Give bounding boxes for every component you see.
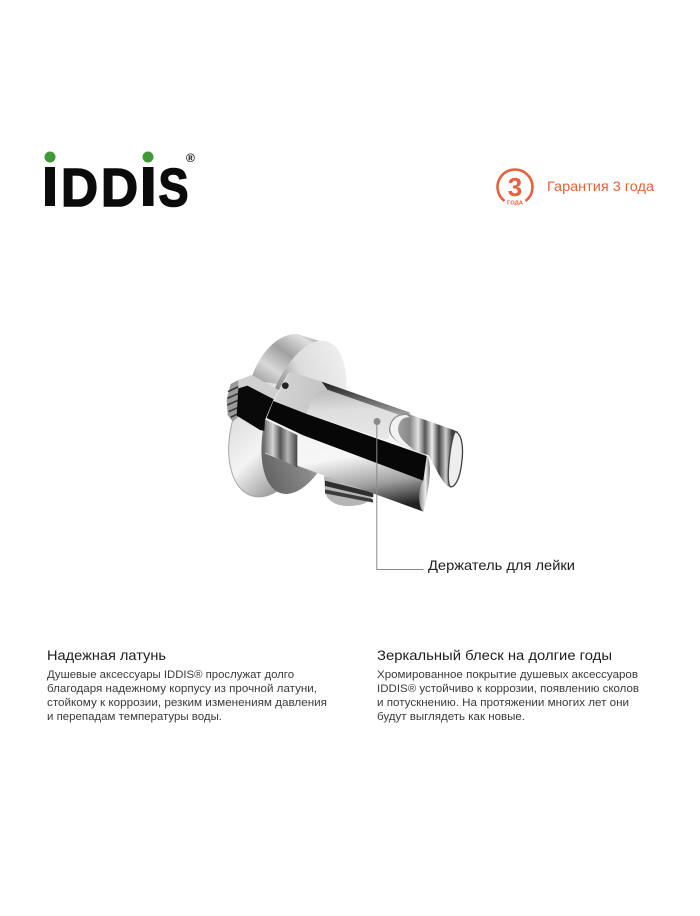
body: brass: Душевые аксессуары IDDIS® прослужат долго (47, 669, 294, 681)
body: brass: и перепадам температуры воды. (47, 711, 222, 723)
callout: holder leader line (374, 418, 424, 570)
body: brass: стойкому к коррозии, резким изменениям давления (47, 697, 327, 709)
body: mirror shine: Хромированное покрытие душевых аксессуаров (377, 669, 638, 681)
logo: IDDIS: S (158, 158, 188, 218)
icon: 3 year warranty: 3 (508, 172, 522, 202)
body: mirror shine: и потускнению. На протяжении многих лет они (377, 697, 629, 709)
warranty text: Гарантия 3 года (547, 178, 654, 194)
body: mirror shine: будут выглядеть как новые. (377, 711, 525, 723)
product: shower holder (213, 331, 463, 512)
warranty badge (498, 169, 654, 206)
heading: mirror shine: Зеркальный блеск на долгие годы (377, 647, 612, 663)
icon: 3 year warranty (498, 169, 532, 206)
logo: IDDIS (44, 151, 195, 218)
body: brass (47, 669, 327, 723)
icon: 3 year warranty: ГОДА (507, 200, 523, 206)
body: mirror shine: IDDIS® устойчиво к коррозии, появлению сколов (377, 683, 639, 695)
text block: mirror shine (377, 647, 639, 723)
logo: IDDIS: D (61, 158, 98, 218)
callout label: Держатель для лейки (428, 557, 575, 573)
logo: IDDIS: D (101, 158, 138, 218)
body: brass: благодаря надежному корпусу из прочной латуни, (47, 683, 317, 695)
body: mirror shine (377, 669, 639, 723)
logo: IDDIS: ® (186, 151, 195, 165)
heading: brass: Надежная латунь (47, 647, 166, 663)
text block: brass (47, 647, 327, 723)
